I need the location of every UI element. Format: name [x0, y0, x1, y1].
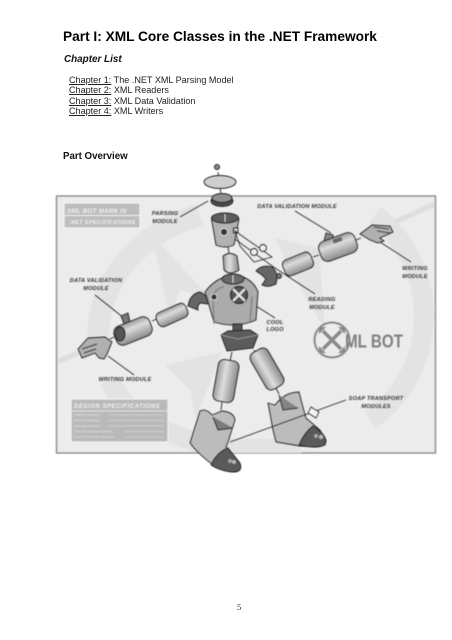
chapter list: Chapter 2: XML Readers [69, 85, 169, 95]
callout labels: LOGO [266, 327, 284, 333]
chapter list [69, 75, 234, 116]
robot head: antenna and parsing module [204, 164, 239, 247]
callout labels: MODULE [309, 305, 335, 311]
page number: 5 [237, 602, 241, 612]
chapter list: Chapter 1: The .NET XML Parsing Model [69, 75, 234, 85]
title box: XML Bot Mark IV: XML BOT MARK IV [66, 209, 127, 215]
XML Bot logo [314, 322, 404, 358]
callout labels: SOAP TRANSPORT [349, 396, 404, 402]
chapter list: Chapter 4: XML Writers [69, 106, 163, 116]
XML Bot logo: ML BOT [345, 330, 404, 352]
left arm: validation and writing modules [78, 292, 208, 359]
soap module callout line [230, 400, 346, 442]
part overview heading: Part Overview [63, 151, 128, 162]
callout labels: MODULE [83, 286, 109, 292]
right boot: SOAP transport module [268, 392, 326, 447]
reading module connector [235, 231, 272, 262]
robot neck [223, 247, 239, 273]
callout labels: READING [308, 297, 336, 303]
design specifications box [71, 399, 168, 442]
callout labels: WRITING [402, 266, 428, 272]
callout labels: MODULE [152, 219, 178, 225]
chapter list: Chapter 3: XML Data Validation [69, 96, 195, 106]
title: Part I: XML Core Classes in the .NET Framework [63, 29, 377, 44]
design specifications box: DATA VALIDATION MODULE [74, 430, 113, 434]
robot diagram [55, 163, 437, 474]
design specifications box: PARSING MODULE [74, 413, 100, 417]
design specifications box: DESIGN SPECIFICATIONS [74, 404, 160, 410]
callout labels: WRITING MODULE [99, 377, 151, 383]
callout lines [95, 201, 411, 375]
chapter list heading: Chapter List [64, 54, 122, 65]
callout labels: DATA VALIDATION [70, 278, 123, 284]
design specifications box: WRITING MODULE [74, 418, 100, 422]
title box: XML Bot Mark IV: .NET SPECIFICATIONS [69, 220, 136, 226]
callout labels: COOL [267, 320, 284, 326]
robot torso with cool logo [205, 274, 258, 325]
callout labels: DATA VALIDATION MODULE [257, 204, 337, 210]
left boot: SOAP transport module [190, 410, 241, 472]
callout labels: PARSING [152, 211, 179, 217]
right leg [248, 346, 286, 394]
callout labels: MODULES [361, 404, 391, 410]
blueprint panel [56, 196, 436, 453]
left leg [212, 352, 240, 410]
design specifications box: READING MODULE [74, 424, 101, 428]
design specifications box: SOAP TRANSPORT MODULE [74, 435, 114, 439]
callout labels [70, 204, 428, 410]
title box: XML Bot Mark IV [64, 203, 140, 228]
right arm: reading, validation and writing modules [256, 225, 393, 286]
callout labels: MODULE [402, 274, 428, 280]
pelvis [221, 324, 258, 351]
